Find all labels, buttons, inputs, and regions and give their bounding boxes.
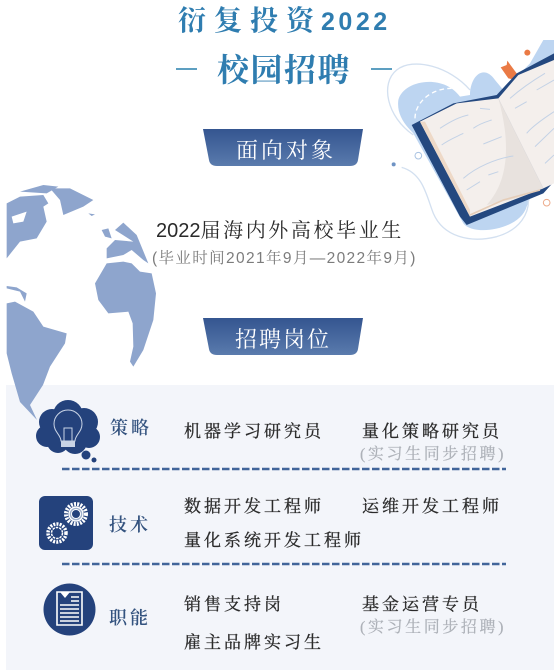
title dash: left [176, 68, 197, 70]
title: campus recruiting: 校园招聘 [217, 52, 351, 88]
text: technology jobs: 量化系统开发工程师 [184, 531, 364, 550]
panel: recruitment background [6, 385, 554, 670]
icon: light bulb cloud [36, 400, 100, 462]
title: company line: 衍复投资2022 [178, 6, 391, 37]
badge: target audience [203, 129, 363, 166]
text: audience: 2022届海内外高校毕业生 [156, 220, 404, 242]
text: function jobs: 雇主品牌实习生 [184, 633, 324, 652]
icon: gears [39, 496, 93, 550]
title dash: right [371, 68, 392, 70]
illustration: open book [387, 40, 554, 240]
text: technology jobs [184, 497, 502, 550]
badge: positions [203, 318, 363, 355]
divider lines [62, 468, 506, 566]
text: technology jobs: 运维开发工程师 [362, 497, 502, 516]
illustration: globe [6, 185, 156, 420]
label: strategy: 策略 [110, 418, 152, 438]
label: technology: 技术 [109, 515, 151, 535]
text: function jobs [184, 595, 506, 652]
icon: document circle [44, 584, 96, 636]
text: strategy jobs: 量化策略研究员 [362, 422, 502, 441]
text: strategy jobs [184, 422, 506, 463]
badge: positions: 招聘岗位 [235, 327, 331, 352]
badge: target audience: 面向对象 [236, 138, 336, 163]
text: technology jobs: 数据开发工程师 [184, 497, 324, 516]
text: function jobs: (实习生同步招聘) [360, 619, 506, 636]
text: strategy jobs: (实习生同步招聘) [360, 446, 506, 463]
text: function jobs: 基金运营专员 [362, 595, 482, 614]
label: functions: 职能 [109, 608, 151, 628]
text: strategy jobs: 机器学习研究员 [184, 422, 324, 441]
text: function jobs: 销售支持岗 [184, 595, 284, 614]
text: graduation period: (毕业时间2021年9月—2022年9月) [152, 250, 417, 267]
